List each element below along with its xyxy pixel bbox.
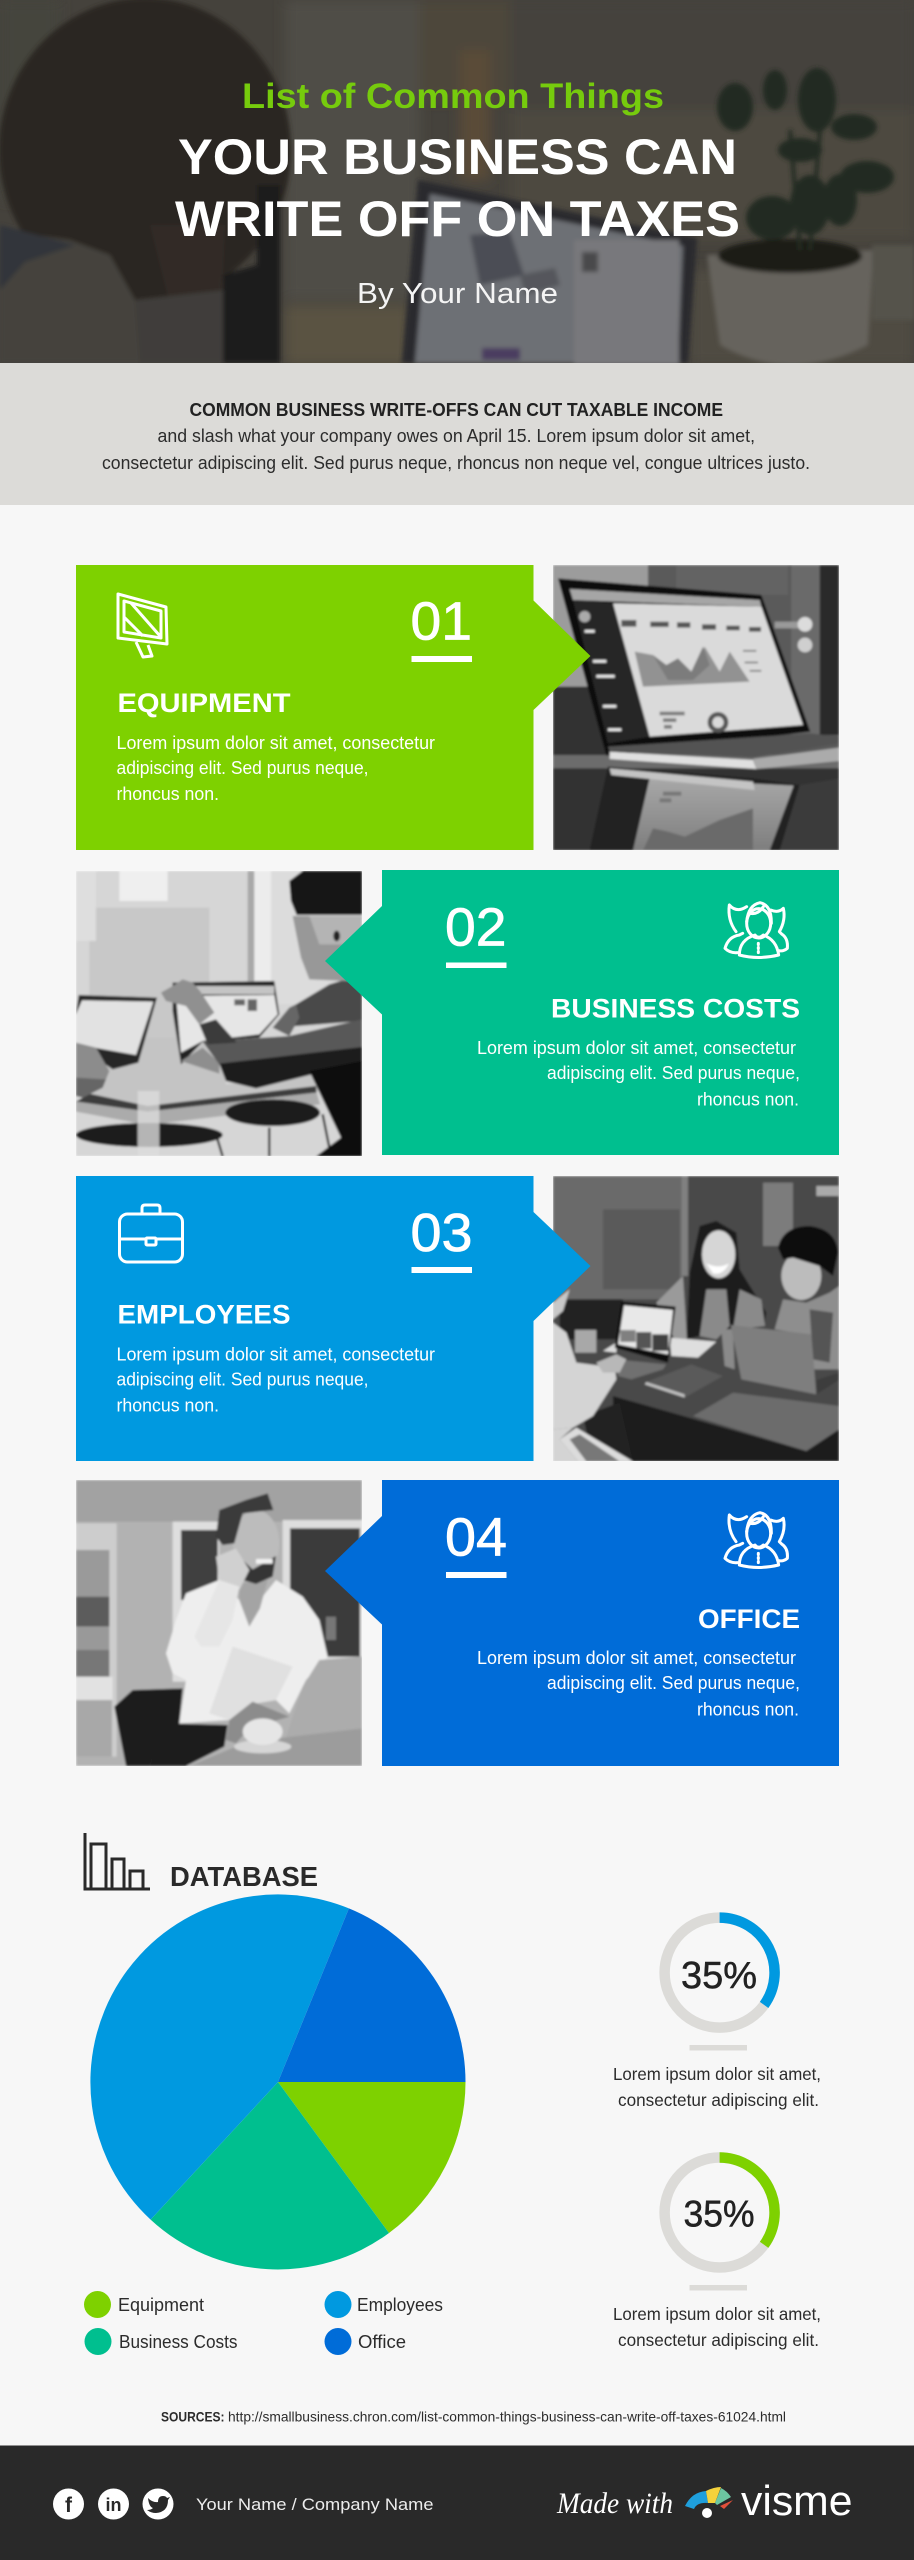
stat: blue donut: 35% xyxy=(681,1955,757,1997)
body text: adipiscing elit. Sed purus neque, xyxy=(547,1673,800,1693)
intro band xyxy=(0,363,914,505)
heading: employees: EMPLOYEES xyxy=(118,1300,290,1330)
number underline xyxy=(412,656,472,662)
body text xyxy=(477,1648,800,1720)
intro text xyxy=(102,426,810,473)
legend: Office xyxy=(358,2332,406,2352)
number underline xyxy=(446,1572,506,1578)
pie chart xyxy=(90,1894,466,2269)
heading: database: DATABASE xyxy=(170,1861,318,1892)
stat: green donut xyxy=(613,2158,821,2350)
legend: Employees xyxy=(357,2295,443,2315)
icon: bar chart xyxy=(85,1833,150,1889)
hero title: YOUR BUSINESS CAN xyxy=(178,129,737,185)
body text: rhoncus non. xyxy=(697,1700,799,1720)
panel: business costs xyxy=(325,870,839,1155)
body text xyxy=(116,733,435,804)
icon: linkedin: in xyxy=(106,2495,122,2515)
icon: monitor xyxy=(118,594,167,657)
stat: green donut: 35% xyxy=(684,2194,754,2234)
panel: equipment xyxy=(76,565,590,850)
visme wordmark: visme xyxy=(741,2477,852,2524)
body text: Lorem ipsum dolor sit amet, consectetur xyxy=(116,733,435,753)
stat: green donut: Lorem ipsum dolor sit amet, xyxy=(613,2304,821,2324)
icon: team xyxy=(725,1513,787,1567)
number 03: 03 xyxy=(410,1203,472,1263)
footer author: Your Name / Company Name xyxy=(196,2495,434,2514)
hero photo xyxy=(0,0,914,365)
icon: visme logo xyxy=(685,2487,733,2518)
number 04: 04 xyxy=(445,1508,507,1568)
body text: adipiscing elit. Sed purus neque, xyxy=(116,1370,368,1390)
heading: office: OFFICE xyxy=(698,1604,800,1634)
legend: Business Costs xyxy=(119,2332,238,2352)
body text xyxy=(116,1344,435,1416)
photo: businessman on phone xyxy=(76,1480,362,1766)
hero title: WRITE OFF ON TAXES xyxy=(175,191,740,247)
panel: employees xyxy=(76,1176,590,1461)
body text xyxy=(477,1038,800,1110)
intro heading: COMMON BUSINESS WRITE-OFFS CAN CUT TAXABLE INCOME xyxy=(190,400,723,420)
author byline: By Your Name xyxy=(357,278,558,310)
number 02: 02 xyxy=(445,898,506,958)
body text: adipiscing elit. Sed purus neque, xyxy=(547,1063,800,1083)
hero title xyxy=(175,129,740,247)
stat: green donut: consectetur adipiscing elit. xyxy=(618,2330,819,2350)
number underline xyxy=(412,1267,472,1273)
stat: blue donut: consectetur adipiscing elit. xyxy=(618,2090,819,2110)
hero subtitle: List of Common Things xyxy=(242,77,664,116)
footer xyxy=(0,2446,914,2560)
number underline xyxy=(446,962,506,968)
body text: adipiscing elit. Sed purus neque, xyxy=(116,758,368,778)
icon: facebook: f xyxy=(65,2494,73,2517)
hero header xyxy=(0,0,914,365)
heading: business costs: BUSINESS COSTS xyxy=(551,994,800,1024)
panel: office xyxy=(325,1480,839,1766)
number 01: 01 xyxy=(410,592,472,652)
photo: people at laptops xyxy=(76,871,362,1156)
legend: Equipment xyxy=(118,2295,204,2315)
intro text: consectetur adipiscing elit. Sed purus neque, rhoncus non neque vel, congue ultrices justo. xyxy=(102,453,810,473)
stat: blue donut xyxy=(613,1918,821,2110)
stat: blue donut: Lorem ipsum dolor sit amet, xyxy=(613,2064,821,2084)
sources: http://smallbusiness.chron.com/list-common-things-business-can-write-off-taxes-61024.html xyxy=(228,2408,786,2424)
icon: briefcase xyxy=(120,1205,182,1262)
icon: team xyxy=(725,903,787,957)
photo: laptop dashboard xyxy=(553,565,839,850)
legend xyxy=(84,2291,443,2355)
body text: Lorem ipsum dolor sit amet, consectetur xyxy=(477,1648,796,1668)
icon: linkedin xyxy=(98,2488,129,2520)
photo: team at cafe table xyxy=(553,1176,839,1461)
body text: rhoncus non. xyxy=(116,784,219,804)
body text: rhoncus non. xyxy=(116,1396,219,1416)
made with: Made with xyxy=(556,2487,673,2520)
body text: Lorem ipsum dolor sit amet, consectetur xyxy=(477,1038,796,1058)
body text: Lorem ipsum dolor sit amet, consectetur xyxy=(116,1344,435,1364)
icon: facebook xyxy=(53,2488,84,2520)
heading: equipment: EQUIPMENT xyxy=(118,688,291,718)
sources: SOURCES: xyxy=(161,2408,224,2424)
intro text: and slash what your company owes on April 15. Lorem ipsum dolor sit amet, xyxy=(158,426,755,446)
body text: rhoncus non. xyxy=(697,1090,799,1110)
icon: twitter xyxy=(142,2488,174,2520)
